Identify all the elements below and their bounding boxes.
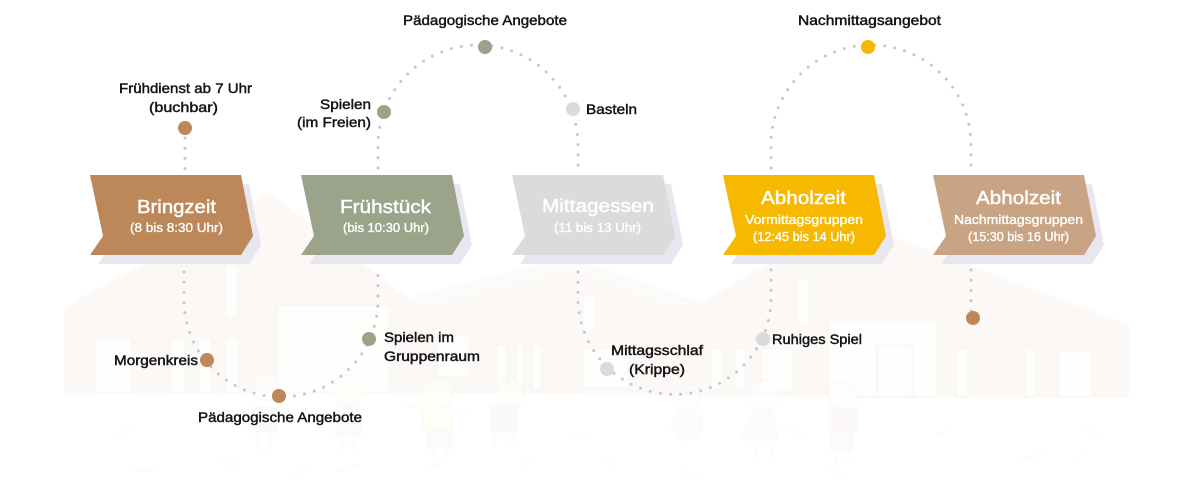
node: Morgenkreis: Morgenkreis: [114, 352, 198, 368]
node: Spielen im Freien: Spielen: [320, 96, 371, 112]
building windows: [95, 265, 1092, 397]
dotted connector: Abholzeit to Abholzeit above: [771, 45, 971, 170]
node: Mittagsschlaf: (Krippe): [629, 361, 685, 377]
panel: Mittagessen: [512, 175, 683, 264]
node: Frühdienst: [119, 80, 252, 135]
heading: Abholzeit Nachmittag: Abholzeit: [976, 188, 1061, 208]
time: Bringzeit: (8 bis 8:30 Uhr): [130, 221, 223, 235]
group: Vormittagsgruppen: Vormittagsgruppen: [745, 213, 863, 227]
panel: Abholzeit Vormittagsgruppen: [723, 175, 894, 264]
node: Pädagogische Angebote unten: [198, 389, 362, 425]
node: Basteln: [566, 101, 637, 117]
node: Pädagogische Angebote oben: [403, 12, 567, 54]
node: Spielen im Gruppenraum: [362, 329, 480, 364]
heading: Frühstück: Frühstück: [340, 197, 432, 217]
time: Nachmittagsgruppen: (15:30 bis 16 Uhr): [968, 230, 1069, 244]
children: [250, 373, 857, 464]
node: Pädagogische Angebote unten: Pädagogische Angebote: [198, 409, 362, 425]
node: Nachmittagsangebot: Nachmittagsangebot: [798, 12, 941, 28]
panel: Bringzeit: [90, 175, 261, 264]
dotted connector: Abholzeit to end point: [970, 270, 972, 312]
node: Frühdienst: Frühdienst ab 7 Uhr: [119, 80, 252, 96]
dotted connector: Frühdienst to Bringzeit: [184, 138, 186, 174]
time: Frühstück: (bis 10:30 Uhr): [343, 221, 429, 235]
node: Mittagsschlaf: Mittagsschlaf: [611, 342, 703, 358]
node: Basteln: Basteln: [586, 101, 637, 117]
dotted connector: Mittagessen to Abholzeit below: [578, 268, 771, 394]
node: Frühdienst: (buchbar): [149, 99, 218, 115]
node: Spielen im Gruppenraum: Gruppenraum: [384, 348, 480, 364]
heading: Bringzeit: Bringzeit: [137, 197, 216, 217]
time: Vormittagsgruppen: (12:45 bis 14 Uhr): [753, 230, 855, 244]
building silhouette: [64, 193, 1129, 398]
dotted connector: Frühstück to Mittagessen above: [378, 45, 578, 170]
heading: Abholzeit Vormittag: Abholzeit: [761, 188, 846, 208]
time: Mittagessen: (11 bis 13 Uhr): [554, 221, 641, 235]
node: Mittagsschlaf: [600, 342, 703, 377]
node: Spielen im Freien: (im Freien): [297, 114, 371, 130]
grass tufts: [115, 427, 1099, 480]
node: Nachmittagsangebot: [798, 12, 941, 54]
dotted connector: Bringzeit to Frühstück below: [184, 268, 378, 397]
heading: Mittagessen: Mittagessen: [542, 196, 654, 216]
node: Spielen im Gruppenraum: Spielen im: [384, 329, 454, 345]
group: Nachmittagsgruppen: Nachmittagsgruppen: [954, 213, 1083, 227]
node: Pädagogische Angebote oben: Pädagogische Angebote: [403, 12, 567, 28]
node: Ruhiges Spiel: Ruhiges Spiel: [772, 331, 862, 347]
node: Endpunkt: [966, 311, 980, 325]
panel: Frühstück: [301, 175, 472, 264]
panel: Abholzeit Nachmittagsgruppen: [933, 175, 1104, 264]
node: Spielen im Freien: [297, 96, 391, 130]
background: faint building and children illustration: [64, 193, 1129, 480]
